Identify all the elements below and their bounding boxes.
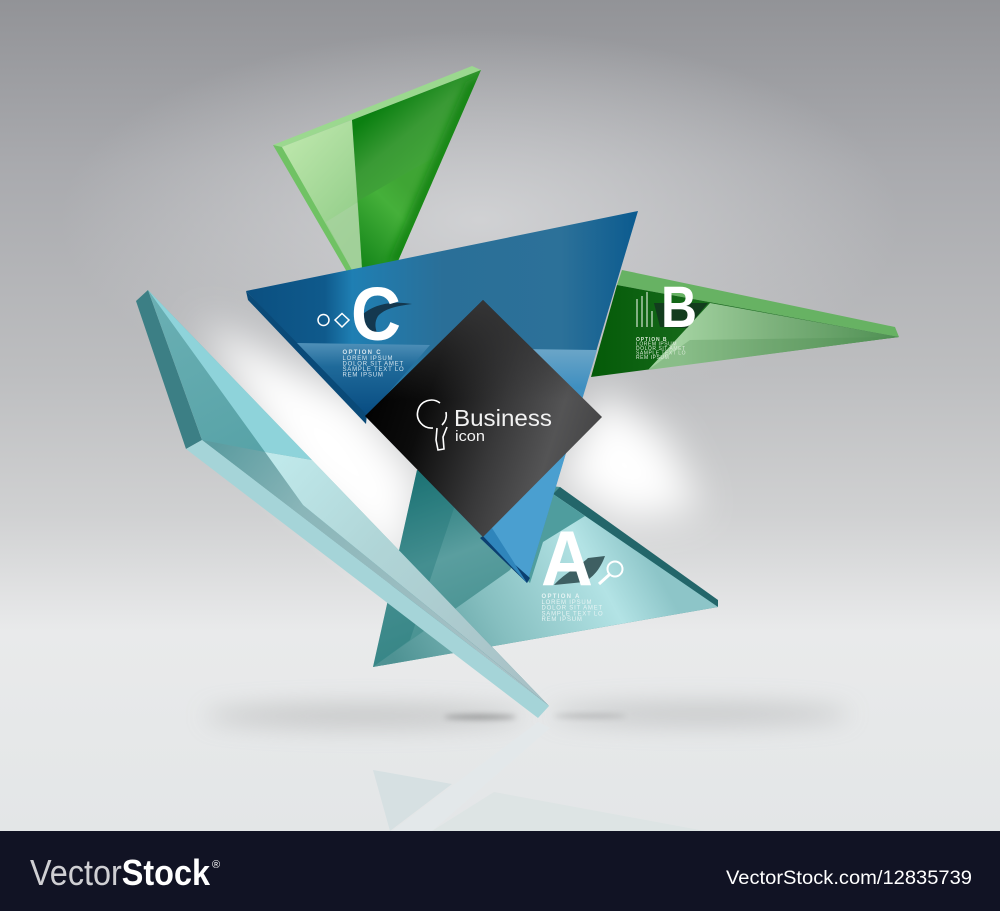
vectorstock logo: VectorStock bbox=[30, 852, 211, 893]
option B text: SAMPLE TEXT LO bbox=[636, 350, 686, 356]
green top triangle bbox=[273, 66, 490, 272]
business icon heading: icon bbox=[455, 429, 485, 445]
floor shadows bbox=[205, 703, 850, 727]
option A text: REM IPSUM bbox=[542, 617, 583, 623]
teal lower triangle bbox=[373, 470, 718, 667]
option C text: REM IPSUM bbox=[342, 372, 384, 378]
option B text bbox=[636, 337, 686, 361]
option B text: DOLOR SIT AMET bbox=[636, 346, 686, 352]
option B text: LOREM IPSUM bbox=[636, 342, 677, 348]
business icon heading bbox=[454, 405, 552, 445]
option A text: DOLOR SIT AMET bbox=[542, 606, 603, 612]
option C text: LOREM IPSUM bbox=[342, 356, 393, 362]
magnifier icon bbox=[599, 562, 622, 584]
green right triangle bbox=[591, 270, 899, 377]
letter B with bars bbox=[637, 275, 708, 340]
floor reflection bbox=[373, 722, 705, 831]
option C text bbox=[342, 350, 404, 378]
option C text: SAMPLE TEXT LO bbox=[342, 367, 404, 373]
option B text: REM IPSUM bbox=[636, 355, 669, 361]
letter C with icons: C bbox=[351, 272, 401, 356]
registered mark: ® bbox=[212, 859, 220, 871]
left glass shard bbox=[136, 290, 549, 718]
option A text: SAMPLE TEXT LO bbox=[542, 612, 604, 618]
footer bar bbox=[0, 831, 1000, 911]
business icon heading: Business bbox=[454, 405, 552, 431]
image id: VectorStock.com/12835739 bbox=[726, 867, 972, 889]
icon: key bulb bbox=[417, 400, 447, 450]
letter A with magnifier: A bbox=[541, 514, 593, 602]
option C text: DOLOR SIT AMET bbox=[342, 362, 404, 368]
blue triangle bbox=[246, 211, 638, 583]
option C text: OPTION C bbox=[342, 350, 382, 356]
letter B with bars: B bbox=[661, 275, 697, 340]
option B text: OPTION B bbox=[636, 337, 667, 343]
option A text bbox=[542, 594, 604, 623]
option A text: LOREM IPSUM bbox=[542, 600, 592, 606]
letter A with magnifier bbox=[541, 514, 622, 602]
option A text: OPTION A bbox=[542, 594, 581, 600]
letter C with icons bbox=[318, 272, 412, 356]
black square panel bbox=[365, 300, 602, 537]
